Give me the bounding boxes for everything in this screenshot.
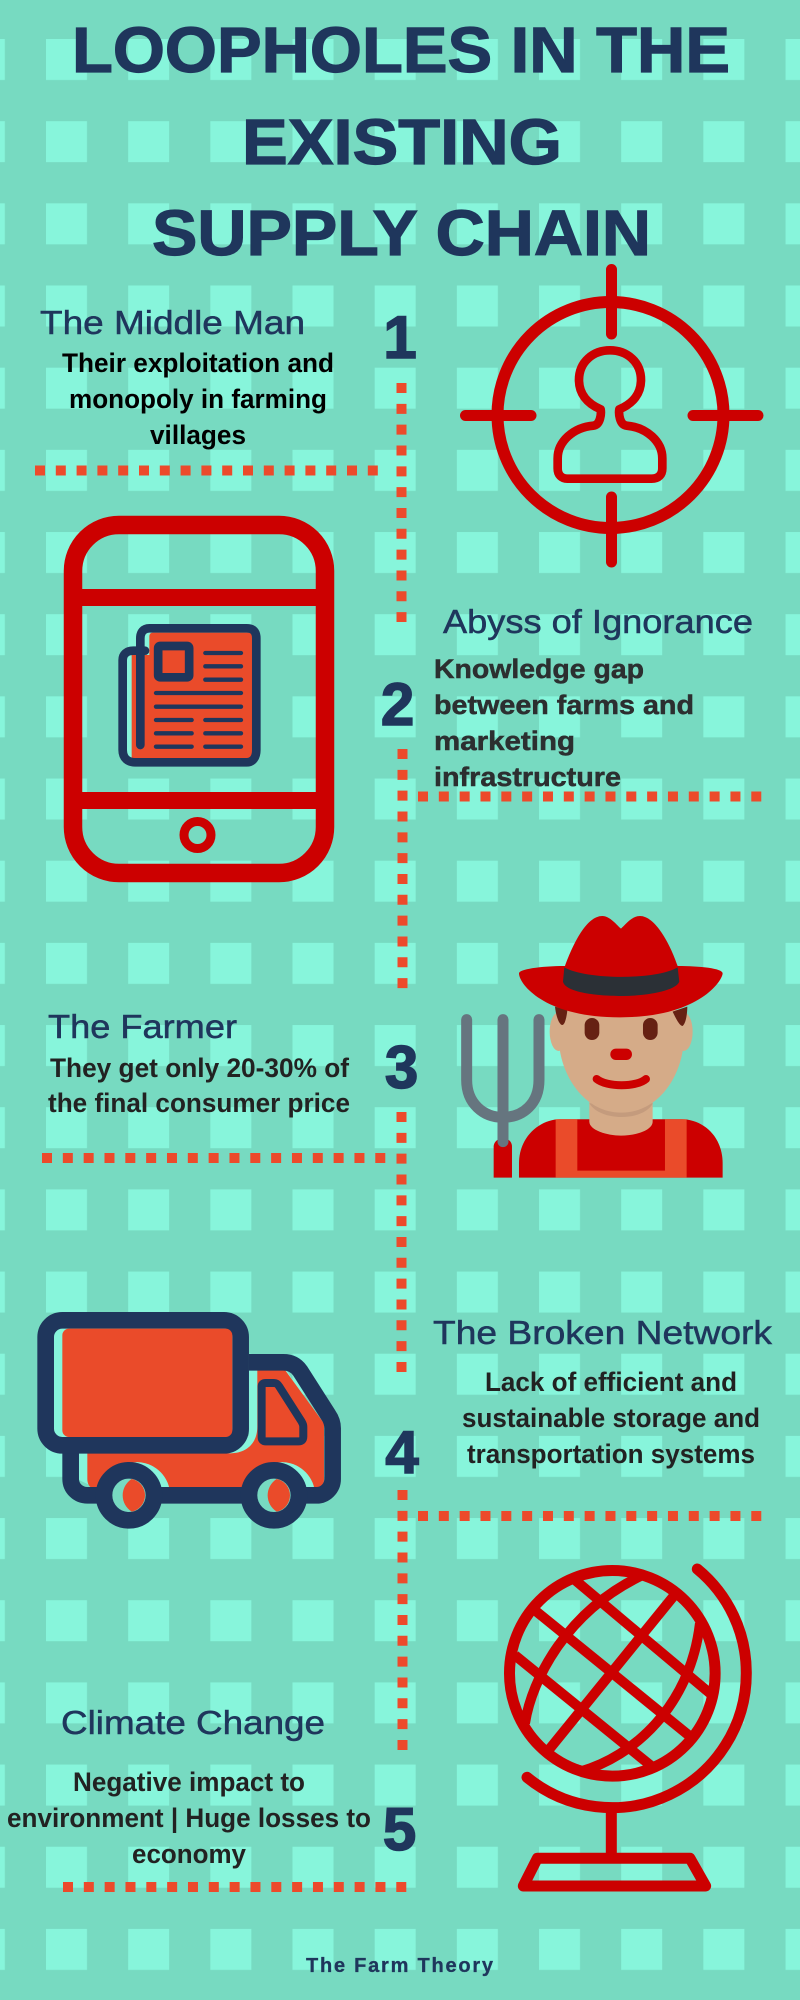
text block: network description: Lack of efficient and	[485, 1367, 737, 1397]
text block: ignorance description	[434, 654, 694, 792]
section 4: the broken network text	[433, 1314, 773, 1469]
number 4: 4	[385, 1419, 419, 1486]
text block: ignorance description: infrastructure	[434, 762, 621, 792]
section 1: the middle man text	[40, 304, 334, 450]
text block: middle man description: Their exploitation and	[62, 348, 334, 378]
text block: farmer description: They get only 20-30% of	[50, 1053, 350, 1083]
text block: climate description	[7, 1767, 371, 1869]
icon: delivery truck	[46, 1320, 333, 1520]
dotted line: section 1 horizontal	[35, 466, 378, 476]
text block: ignorance description: Knowledge gap	[434, 654, 644, 684]
dotted line: section 5 horizontal	[63, 1882, 407, 1892]
icon: desk globe	[509, 1569, 746, 1886]
pitchfork	[467, 1020, 539, 1178]
dotted line: section 3 horizontal	[42, 1153, 386, 1163]
dotted line: section 4 horizontal	[418, 1511, 762, 1521]
text block: ignorance description: marketing	[434, 726, 575, 756]
title	[72, 14, 730, 269]
footer: brand name: The Farm Theory	[306, 1955, 494, 1977]
text block: network description: transportation systems	[467, 1439, 755, 1469]
number 3: 3	[385, 1034, 418, 1101]
heading: the farmer: The Farmer	[48, 1008, 237, 1045]
icon: farmer with pitchfork	[467, 916, 723, 1178]
heading: the broken network: The Broken Network	[433, 1314, 773, 1351]
title: LOOPHOLES IN THE	[72, 14, 730, 86]
text block: middle man description: monopoly in farming	[69, 384, 327, 414]
phone body	[73, 525, 325, 873]
icon: target on person	[466, 270, 758, 562]
section 5: climate change text	[7, 1704, 371, 1869]
number 5: 5	[383, 1796, 416, 1863]
number 1: 1	[383, 304, 417, 371]
heading: climate change: Climate Change	[61, 1704, 325, 1741]
dotted line: section 3 vertical	[396, 1112, 406, 1372]
dotted line: section 4 vertical	[398, 1490, 408, 1750]
title: SUPPLY CHAIN	[152, 197, 651, 269]
text block: climate description: economy	[132, 1839, 246, 1869]
farmer	[519, 916, 723, 1178]
text block: climate description: environment | Huge losses to	[7, 1803, 371, 1833]
newspaper	[123, 628, 256, 762]
text block: middle man description	[62, 348, 334, 450]
heading: abyss of ignorance: Abyss of Ignorance	[443, 603, 753, 640]
text block: climate description: Negative impact to	[73, 1767, 305, 1797]
dotted line: section 2 horizontal	[418, 792, 762, 802]
title: EXISTING	[242, 106, 562, 178]
dotted line: section 1 vertical	[396, 383, 406, 622]
text block: network description	[462, 1367, 760, 1469]
dotted line: section 2 vertical	[398, 749, 408, 989]
heading: the middle man: The Middle Man	[40, 304, 305, 341]
text block: network description: sustainable storage and	[462, 1403, 760, 1433]
section 2: abyss of ignorance text	[434, 603, 753, 792]
text block: farmer description	[48, 1053, 350, 1118]
text block: middle man description: villages	[150, 420, 246, 450]
icon: smartphone with newspaper	[73, 525, 325, 873]
text block: farmer description: the final consumer price	[48, 1088, 350, 1118]
text block: ignorance description: between farms and	[434, 690, 694, 720]
number 2: 2	[381, 671, 414, 738]
section 3: the farmer text	[48, 1008, 350, 1118]
